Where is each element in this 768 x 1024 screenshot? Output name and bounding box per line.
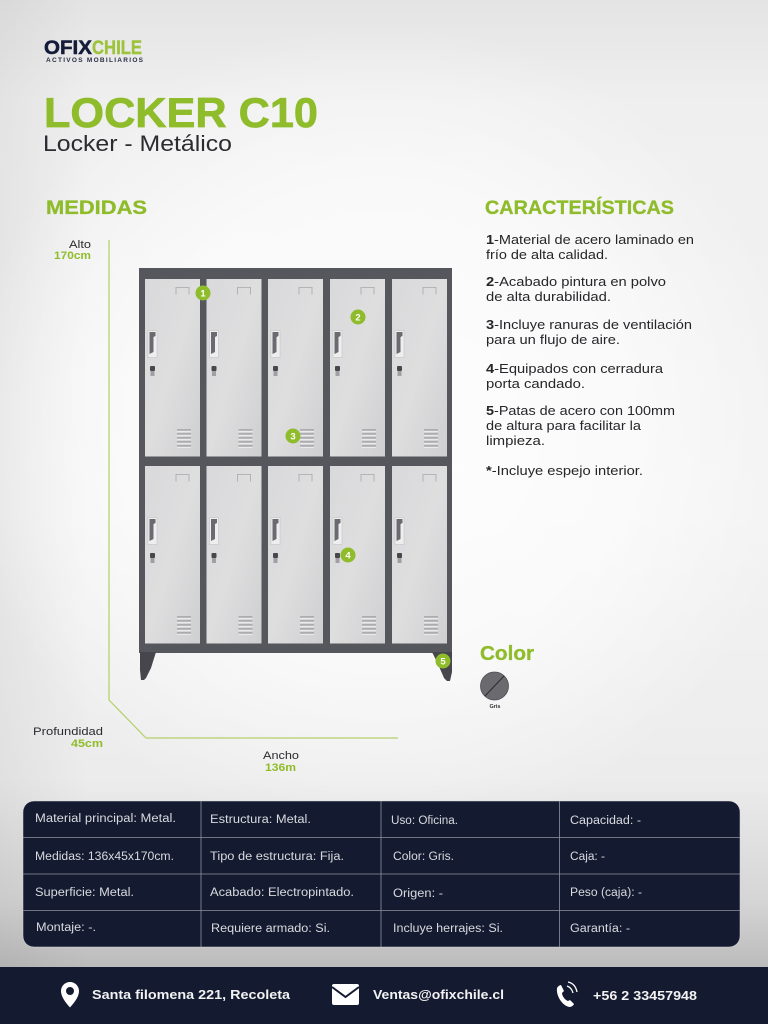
characteristics list: 4-Equipados con cerradura [486, 361, 664, 376]
specifications table: Peso (caja): - [570, 887, 642, 899]
icon: envelope [332, 984, 359, 1005]
specifications table: Origen: - [393, 888, 443, 900]
color section: Color [480, 643, 534, 665]
specifications table: Tipo de estructura: Fija. [210, 851, 344, 863]
specifications table: Color: Gris. [393, 851, 454, 863]
specifications table: Superficie: Metal. [35, 887, 134, 899]
label: alto [54, 239, 91, 262]
marker 3 [286, 428, 300, 444]
label: ancho: 136m [265, 762, 296, 774]
specifications table: Uso: Oficina. [391, 815, 458, 827]
characteristics list: de altura para facilitar la [486, 418, 642, 433]
color section: Gris [489, 704, 501, 710]
marker 5: 5 [440, 656, 446, 668]
specifications table: Incluye herrajes: Si. [393, 923, 503, 935]
heading: medidas: MEDIDAS [46, 197, 147, 219]
characteristics list [486, 232, 694, 478]
marker 4 [340, 548, 356, 562]
subtitle: Locker - Metálico [43, 131, 232, 156]
title: LOCKER C10 [44, 89, 318, 136]
icon: phone [557, 982, 577, 1007]
marker 1 [196, 286, 210, 300]
characteristics list: 2-Acabado pintura en polvo [486, 274, 666, 289]
marker 1: 1 [200, 288, 206, 300]
label: alto: 170cm [54, 250, 91, 262]
logo: OFIX [44, 37, 92, 59]
specifications table [23, 801, 740, 947]
color section [480, 643, 534, 710]
icon: location pin [61, 982, 79, 1008]
characteristics list: 3-Incluye ranuras de ventilación [486, 317, 692, 332]
specifications table: Material principal: Metal. [35, 813, 176, 825]
label: alto: Alto [69, 239, 91, 251]
specifications table: Estructura: Metal. [210, 814, 311, 826]
label: profundidad: Profundidad [33, 726, 103, 738]
logo: ACTIVOS MOBILIARIOS [46, 57, 144, 64]
characteristics list: para un flujo de aire. [486, 332, 620, 347]
footer bar [0, 967, 768, 1024]
marker 2 [350, 310, 366, 324]
email: Ventas@ofixchile.cl [373, 987, 504, 1002]
specifications table: Requiere armado: Si. [211, 923, 330, 935]
marker 3: 3 [290, 432, 296, 442]
characteristics list: de alta durabilidad. [486, 289, 611, 304]
locker illustration [139, 268, 452, 681]
marker 5 [436, 654, 450, 668]
heading: caracteristicas: CARACTERÍSTICAS [485, 196, 674, 219]
characteristics list: *-Incluye espejo interior. [486, 463, 643, 478]
characteristics list: porta candado. [486, 376, 585, 391]
dimension lines [109, 240, 398, 738]
specifications table: Garantía: - [570, 923, 630, 935]
characteristics list: limpieza. [486, 433, 545, 448]
marker 4: 4 [345, 550, 351, 562]
logo: CHILE [92, 37, 142, 59]
characteristics list: frío de alta calidad. [486, 247, 608, 262]
specifications table: Caja: - [570, 851, 605, 863]
label: profundidad [33, 726, 103, 750]
specifications table: Medidas: 136x45x170cm. [35, 851, 174, 863]
phone number: +56 2 33457948 [593, 988, 697, 1003]
label: profundidad: 45cm [71, 738, 103, 750]
logo [44, 37, 144, 64]
label: ancho: Ancho [263, 750, 299, 762]
characteristics list: 5-Patas de acero con 100mm [486, 403, 675, 418]
address: Santa filomena 221, Recoleta [92, 987, 291, 1002]
specifications table: Capacidad: - [570, 815, 641, 827]
characteristics list: 1-Material de acero laminado en [486, 232, 694, 247]
label: ancho [263, 750, 299, 774]
specifications table: Acabado: Electropintado. [210, 887, 354, 899]
marker 2: 2 [355, 312, 361, 324]
specifications table: Montaje: -. [36, 922, 96, 934]
